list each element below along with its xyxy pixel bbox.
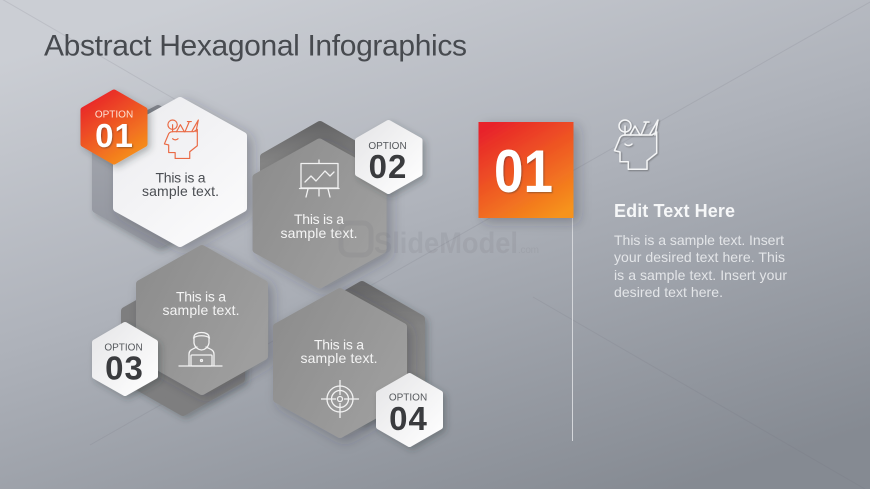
front hexagon 02 (256, 142, 382, 284)
icon: head with ideas, orange (164, 120, 198, 158)
option 04 badge: 04 (389, 400, 428, 437)
front hexagon 01 (117, 101, 243, 243)
hexagon 02 text: sample text. (280, 225, 358, 241)
front hexagon 04 (277, 292, 403, 434)
option 04 badge: OPTION (389, 392, 427, 404)
detail body text (614, 232, 787, 300)
option 01 badge: OPTION (95, 110, 133, 120)
panel: option 03 hexagon group (95, 249, 264, 412)
number tile 01 (478, 122, 574, 218)
vertical connector line (572, 218, 574, 441)
hexagon 02 text (280, 211, 358, 241)
watermark: .com (518, 245, 539, 256)
hexagon 04 text: This is a (314, 336, 364, 352)
option 01 badge (84, 92, 144, 162)
back hexagon 03 (125, 278, 241, 412)
detail body text: This is a sample text. Insert (614, 232, 784, 248)
watermark: SlideModel (374, 227, 518, 260)
icon: target (321, 380, 359, 418)
hexagon 01 text: sample text. (142, 183, 219, 199)
front hexagon 03 (140, 249, 264, 391)
title: Abstract Hexagonal Infographics (44, 30, 467, 62)
back hexagon 04 (303, 285, 421, 420)
panel: option 01 hexagon group (84, 92, 243, 244)
hexagon 01 text (142, 170, 219, 199)
back hexagon 01 (96, 109, 220, 244)
detail body text: desired text here. (614, 284, 723, 300)
option 03 badge: 03 (105, 350, 144, 386)
hexagon 03 text: sample text. (162, 302, 240, 318)
option 04 badge (379, 376, 440, 444)
hexagon 04 text: sample text. (300, 350, 378, 366)
hexagon 04 text (300, 336, 378, 366)
hexagon 03 text: This is a (176, 288, 226, 304)
hexagon 01 text: This is a (156, 170, 206, 186)
option 02 badge (358, 123, 420, 191)
option 02 badge: 02 (369, 148, 407, 185)
icon: person at laptop (179, 332, 222, 366)
option 02 badge: OPTION (368, 141, 407, 152)
icon: head with ideas, white (614, 120, 658, 169)
back hexagon 02 (264, 125, 376, 254)
option 01 badge: 01 (95, 117, 134, 154)
option 03 badge (95, 325, 155, 393)
option 03 badge: OPTION (104, 342, 143, 354)
panel: option 02 hexagon group (256, 123, 420, 284)
icon: presentation board (300, 160, 339, 197)
detail heading: Edit Text Here (614, 201, 735, 221)
detail body text: is a sample text. Insert your (614, 267, 787, 283)
panel: option 04 hexagon group (277, 285, 440, 444)
hexagon 02 text: This is a (294, 211, 344, 227)
number tile 01: 01 (494, 138, 553, 205)
hexagon 03 text (162, 288, 240, 318)
detail body text: your desired text here. This (614, 249, 785, 265)
